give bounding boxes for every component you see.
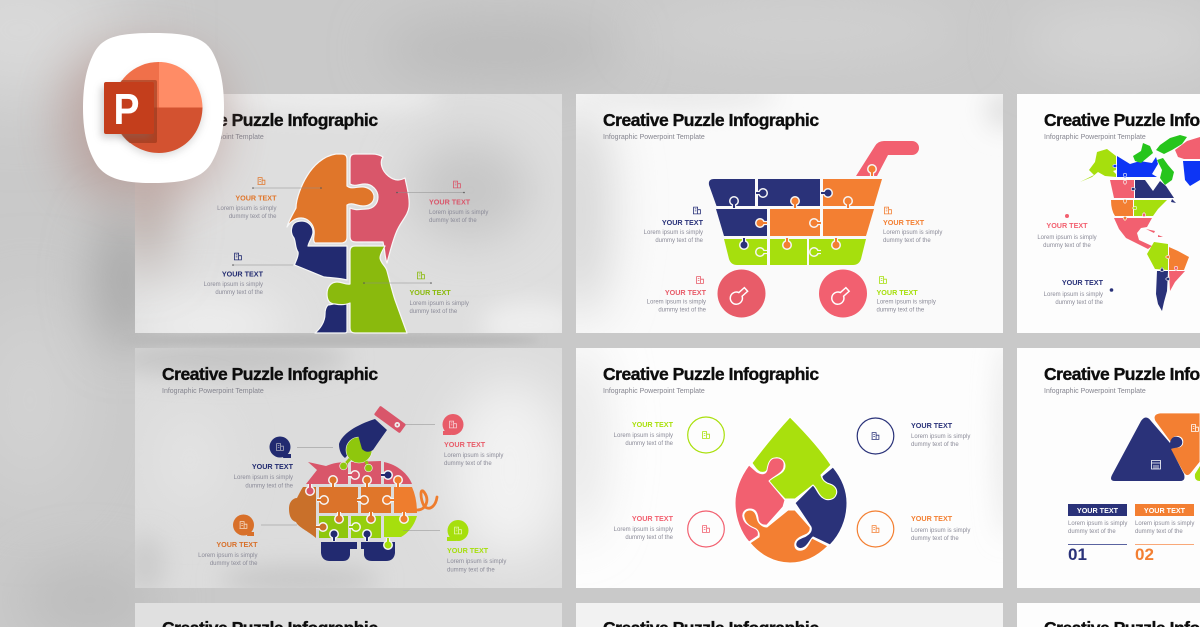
western Canada	[1110, 180, 1134, 198]
subtitle: Infographic Powerpoint Template	[162, 388, 264, 395]
panel: water drop slide	[554, 340, 1013, 588]
label: lime: YOUR TEXT	[876, 288, 918, 297]
text block: orange: Lorem ipsum is simply	[1135, 521, 1194, 527]
subtitle: Infographic Powerpoint Template	[603, 388, 705, 395]
label: orange: dummy text of the	[210, 561, 258, 567]
left wheel	[718, 270, 766, 318]
label: navy: dummy text of the	[655, 238, 704, 244]
label: navy: Lorem ipsum is simply	[644, 230, 703, 236]
number: 02: 02	[1135, 545, 1154, 564]
label: orange: Lorem ipsum is simply	[911, 528, 970, 534]
icon: pink building	[453, 181, 460, 188]
label: green: dummy text of the	[410, 309, 458, 315]
Greenland pink	[1175, 137, 1200, 159]
icon: orange panel white	[1191, 425, 1198, 431]
green puzzle wrench	[340, 437, 372, 472]
curly tail	[417, 491, 437, 510]
southern South America	[1169, 271, 1185, 291]
label: navy	[644, 218, 704, 244]
panel: triangle puzzle slide	[1017, 348, 1200, 588]
title: Creative Puzzle Infographic	[603, 364, 819, 384]
title: Creative Puzzle Infographic	[603, 110, 819, 130]
label: green	[410, 288, 469, 315]
chart: puzzle head	[287, 154, 409, 333]
badge tile	[83, 33, 224, 183]
label: navy: dummy text of the	[245, 484, 294, 490]
thumb	[358, 423, 386, 452]
label: navy: Lorem ipsum is simply	[204, 282, 263, 288]
logo square inner shadow	[118, 80, 157, 143]
leader line: lime	[403, 530, 440, 532]
piece: navy face	[291, 221, 347, 280]
label: pink: Lorem ipsum is simply	[614, 527, 673, 533]
icon ring: lime	[688, 417, 724, 453]
label: orange: Lorem ipsum is simply	[217, 206, 276, 212]
cart handle	[856, 141, 919, 176]
label: pink: Lorem ipsum is simply	[647, 300, 706, 306]
subtitle: Infographic Powerpoint Template	[603, 134, 705, 141]
piece: navy neck	[315, 303, 347, 333]
marker dot: pink	[1065, 214, 1069, 218]
label: navy: YOUR TEXT	[222, 270, 264, 278]
chart: puzzle cart	[709, 141, 919, 318]
icon: green building	[417, 272, 424, 279]
banner: navy: YOUR TEXT	[1077, 506, 1119, 515]
icon ring: orange	[857, 511, 894, 547]
label: pink: Lorem ipsum is simply	[429, 210, 488, 216]
navy triangle	[1111, 418, 1184, 481]
piece: orange	[744, 510, 828, 563]
label: pink: Lorem ipsum is simply	[444, 453, 503, 459]
banner: orange: YOUR TEXT	[1144, 506, 1186, 515]
label: navy: Lorem ipsum is simply	[911, 434, 970, 440]
label: pink: dummy text of the	[658, 308, 707, 314]
badge: navy	[270, 436, 291, 458]
label: pink: dummy text of the	[429, 218, 477, 224]
icon: navy	[693, 207, 700, 214]
label: navy: Lorem ipsum is simply	[1044, 292, 1103, 298]
text block: navy	[1068, 521, 1127, 535]
subtitle: Infographic Powerpoint Template	[1044, 134, 1146, 141]
label: navy: YOUR TEXT	[1062, 278, 1104, 287]
label: orange: Lorem ipsum is simply	[198, 553, 258, 559]
map connectors	[1112, 164, 1178, 281]
label: navy: dummy text of the	[911, 442, 959, 448]
icon: pink	[696, 277, 703, 283]
label: orange: dummy text of the	[911, 536, 959, 542]
label: lime	[447, 546, 506, 574]
panel: bottom row slide left	[135, 603, 562, 627]
leader line: navy	[232, 264, 293, 266]
coin hand	[339, 419, 387, 458]
label: orange	[911, 514, 970, 542]
banner: navy	[1068, 504, 1127, 516]
label: lime: dummy text of the	[447, 568, 495, 574]
label: orange: dummy text of the	[229, 214, 277, 220]
puzzle connectors	[729, 164, 877, 257]
label: navy: YOUR TEXT	[662, 218, 704, 227]
piece: orange forehead	[287, 154, 374, 243]
chart: puzzle map	[1080, 135, 1200, 311]
label: lime: Lorem ipsum is simply	[614, 433, 673, 439]
label: navy	[911, 421, 970, 448]
number: 01	[1068, 544, 1127, 564]
number: 02	[1135, 544, 1194, 564]
label: navy: YOUR TEXT	[252, 462, 294, 471]
piece: pink crown	[350, 154, 409, 263]
label: green: YOUR TEXT	[410, 288, 451, 297]
leader line: pink	[405, 424, 435, 426]
lime triangle	[1195, 466, 1200, 481]
panel: piggy bank slide	[110, 340, 570, 595]
navy feet	[321, 542, 395, 561]
Chile and Argentina	[1156, 271, 1168, 311]
label: pink	[647, 288, 707, 314]
title: Creative Puzzle Infographic	[162, 364, 378, 384]
label: pink: YOUR TEXT	[444, 440, 486, 449]
label: orange: Lorem ipsum is simply	[883, 230, 942, 236]
label: navy: dummy text of the	[1055, 300, 1104, 306]
lime belly row	[319, 516, 417, 538]
Alaska	[1080, 149, 1116, 182]
label: navy	[1044, 278, 1104, 306]
icon ring: navy	[857, 418, 894, 454]
logo letter: P	[114, 85, 140, 134]
label: navy	[234, 462, 294, 490]
label: lime: YOUR TEXT	[447, 546, 489, 555]
panel: bottom row slide right	[1017, 603, 1200, 627]
label: navy: YOUR TEXT	[911, 421, 953, 430]
text block: navy: Lorem ipsum is simply	[1068, 521, 1127, 527]
label: lime: Lorem ipsum is simply	[447, 559, 506, 565]
label: orange: YOUR TEXT	[235, 194, 277, 202]
orange triangle	[1154, 413, 1200, 476]
leader line: navy	[297, 446, 333, 448]
label: pink	[614, 514, 674, 541]
logo square	[104, 82, 154, 134]
label: lime	[614, 420, 674, 447]
subtitle: Infographic Powerpoint Template	[162, 134, 264, 141]
chart: puzzle water drop	[735, 417, 847, 563]
logo circle shadow	[113, 66, 203, 156]
label: pink: Lorem ipsum is simply	[1037, 235, 1097, 241]
label: pink	[429, 198, 488, 224]
title: Creative Puzzle Infographic	[162, 110, 378, 130]
label: pink: YOUR TEXT	[665, 288, 707, 297]
badge: pink	[442, 414, 464, 435]
label: pink: YOUR TEXT	[632, 514, 674, 523]
icon ring: pink	[688, 511, 724, 547]
badge: lime	[447, 520, 468, 541]
Mexico	[1114, 218, 1152, 249]
icon: lime	[879, 277, 886, 283]
icon: navy building	[234, 253, 241, 260]
label: pink	[1037, 221, 1097, 249]
banner: orange	[1135, 504, 1194, 516]
leader line: green	[363, 282, 432, 284]
chart: puzzle piggy bank	[289, 406, 437, 561]
northern South America	[1147, 242, 1168, 270]
panel: americas map slide	[1017, 94, 1200, 333]
label: navy: Lorem ipsum is simply	[234, 475, 293, 481]
label: pink: dummy text of the	[1043, 243, 1092, 249]
Caribbean	[1146, 229, 1163, 237]
logo quadrants	[113, 62, 202, 153]
label: orange	[198, 540, 258, 567]
pink back row	[306, 461, 412, 484]
cart bottom row	[724, 239, 866, 265]
arctic islands	[1133, 135, 1187, 185]
label: green: Lorem ipsum is simply	[410, 301, 469, 307]
badge: orange	[233, 514, 254, 536]
label: orange	[883, 218, 942, 244]
panel: shopping cart slide	[576, 94, 1003, 333]
label: pink: dummy text of the	[625, 535, 674, 541]
icon: bank white	[1152, 460, 1160, 469]
label: lime: dummy text of the	[625, 441, 674, 447]
label: orange: YOUR TEXT	[883, 218, 925, 227]
puzzle connectors	[305, 470, 409, 550]
text block: orange	[1135, 521, 1194, 535]
label: pink: dummy text of the	[444, 461, 492, 467]
icon: PowerPoint app badge	[63, 33, 224, 198]
piece: green shoulder	[327, 246, 407, 333]
cart middle row	[716, 209, 874, 236]
leader line: orange	[261, 524, 297, 526]
Brazil	[1169, 247, 1189, 270]
western USA	[1111, 200, 1133, 216]
label: lime	[876, 288, 936, 314]
marker dot: navy	[1110, 288, 1113, 292]
panel: bottom row slide centre	[576, 603, 1003, 627]
label: pink: YOUR TEXT	[429, 198, 471, 206]
leader line: pink	[396, 192, 465, 193]
leader line: orange	[252, 187, 322, 189]
label: orange	[217, 194, 277, 220]
label: orange: YOUR TEXT	[911, 514, 953, 523]
northern Canada	[1117, 156, 1158, 177]
cuff	[374, 406, 406, 433]
cart top row	[709, 179, 882, 206]
right wheel	[819, 270, 867, 318]
logo square drop shadow	[101, 86, 151, 138]
eastern Canada	[1135, 180, 1176, 203]
Greenland blue	[1183, 161, 1200, 186]
icon: orange	[884, 207, 891, 214]
label: orange: YOUR TEXT	[216, 540, 258, 549]
piece: navy	[795, 467, 847, 549]
orange middle row and snout	[289, 487, 417, 538]
chart: puzzle triangles	[1111, 413, 1200, 481]
text block: orange: dummy text of the	[1135, 529, 1183, 535]
piece: pink	[735, 458, 785, 542]
text block: navy: dummy text of the	[1068, 529, 1116, 535]
number: 01: 01	[1068, 545, 1087, 564]
label: navy: dummy text of the	[215, 290, 264, 296]
label: orange: dummy text of the	[883, 238, 931, 244]
eastern USA	[1134, 200, 1167, 216]
subtitle: Infographic Powerpoint Template	[1044, 388, 1146, 395]
label: lime: dummy text of the	[876, 308, 925, 314]
label: lime: Lorem ipsum is simply	[876, 300, 936, 306]
label: pink: YOUR TEXT	[1046, 221, 1088, 230]
piece: lime	[752, 417, 837, 500]
label: lime: YOUR TEXT	[632, 420, 674, 429]
panel: head puzzle slide	[135, 94, 562, 334]
icon: orange building	[258, 178, 265, 184]
label: pink	[444, 440, 503, 467]
label: navy	[204, 270, 264, 296]
